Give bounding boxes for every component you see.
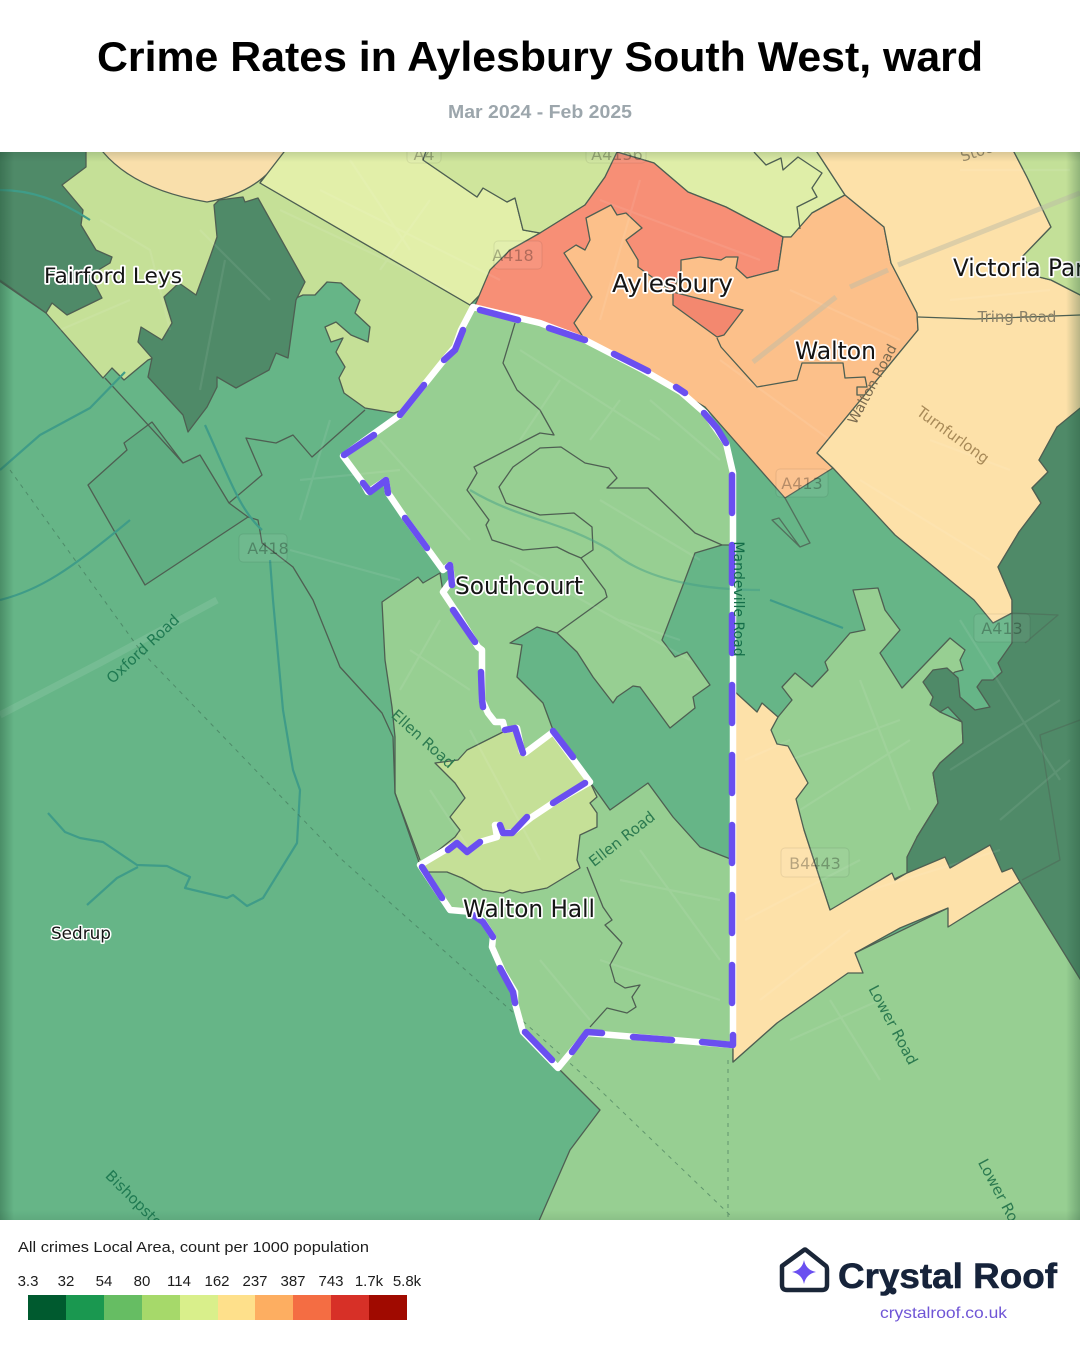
road labels: Oxford Road xyxy=(103,611,183,687)
ward internal boundary lines xyxy=(0,152,1080,1027)
area: red island within orange xyxy=(673,292,743,337)
road shields: A413 xyxy=(781,474,823,493)
icon: house with star xyxy=(782,1250,827,1290)
rivers xyxy=(0,190,843,906)
place labels: Fairford Leys xyxy=(44,264,182,288)
area: eastern dark green xyxy=(907,400,1080,995)
legend tick labels: 387 xyxy=(280,1273,306,1290)
street network xyxy=(0,169,1070,964)
legend tick labels: 114 xyxy=(167,1273,191,1290)
logo: Crystal Roof xyxy=(782,1250,1057,1322)
place labels: Walton Hall xyxy=(463,895,595,923)
road shields: A418 xyxy=(247,539,289,558)
dashed boundary line xyxy=(10,470,730,1220)
legend tick labels: 5.8k xyxy=(393,1273,422,1290)
road labels: Lower Road xyxy=(974,1156,1031,1241)
road labels: Tring Road xyxy=(977,308,1056,326)
road labels: Ellen Road xyxy=(585,808,659,870)
area: tan circle at the top xyxy=(102,152,283,203)
area: Turnfurlong tan xyxy=(810,140,1080,623)
area: mid-green wedge inside ward xyxy=(510,545,733,860)
road labels: Walton Road xyxy=(845,342,901,427)
legend colour scale xyxy=(28,1295,407,1320)
road labels: Lower Road xyxy=(865,982,921,1068)
road shields: A418 xyxy=(492,246,534,265)
legend tick labels: 162 xyxy=(204,1273,230,1290)
area: Aylesbury red-orange xyxy=(474,152,784,335)
area: Fairford Leys dark green centre xyxy=(138,197,305,432)
legend tick labels xyxy=(18,1273,422,1290)
area: western farmland block xyxy=(88,422,248,585)
road labels: Bishopstone xyxy=(102,1167,179,1244)
legend tick labels: 237 xyxy=(242,1273,268,1290)
road labels: Mandeville Road xyxy=(730,541,746,657)
legend tick labels: 32 xyxy=(58,1273,74,1290)
road shields xyxy=(239,135,1030,877)
road labels: Ellen Road xyxy=(388,706,458,772)
subtitle: date range: Mar 2024 - Feb 2025 xyxy=(448,102,632,122)
area: Victoria Park tan, south-east xyxy=(733,690,1020,1062)
place labels: Walton xyxy=(795,337,876,365)
road shields: A4156 xyxy=(591,145,643,164)
area: north central green xyxy=(422,152,616,234)
ward boundary: purple dashes xyxy=(344,310,733,1060)
legend tick labels: 1.7k xyxy=(355,1273,384,1290)
legend tick labels: 54 xyxy=(96,1273,112,1290)
legend tick labels: 3.3 xyxy=(18,1273,38,1290)
area: east light green xyxy=(771,588,965,910)
logo wordmark: Crystal Roof xyxy=(838,1257,1057,1296)
area: north pale yellow-green xyxy=(620,152,844,236)
legend tick labels: 743 xyxy=(318,1273,344,1290)
legend tick labels: 80 xyxy=(134,1273,150,1290)
area: pale green Walton Court xyxy=(420,728,597,893)
area: northern pale yellow band xyxy=(260,140,540,305)
area: large south green xyxy=(535,882,1080,1230)
logo y-tail drop xyxy=(890,1288,896,1294)
map edge vignette xyxy=(0,152,1080,1220)
place labels: Sedrup xyxy=(51,924,111,944)
ward boundary: white xyxy=(343,307,733,1068)
area: Walton orange xyxy=(564,195,918,498)
area: top-right green xyxy=(1013,152,1080,296)
road labels xyxy=(102,126,1056,1244)
legend title: All crimes Local Area, count per 1000 population xyxy=(18,1239,369,1256)
road shields: A413 xyxy=(981,619,1023,638)
area: north-west dark green xyxy=(0,140,112,315)
legend xyxy=(18,1239,422,1320)
road labels: Turnfurlong xyxy=(912,402,993,467)
place labels: Aylesbury xyxy=(612,269,733,298)
area: Fairford Leys pale green xyxy=(46,140,480,413)
road labels: Stocklake xyxy=(958,126,1033,166)
place labels xyxy=(44,254,1080,944)
title: Crime Rates in Aylesbury South West, ward xyxy=(97,33,983,80)
place labels: Southcourt xyxy=(455,572,583,600)
road shields: A4 xyxy=(413,145,435,164)
area: ward interior light green xyxy=(343,307,733,1068)
road shields: B4443 xyxy=(789,854,841,873)
railway line xyxy=(753,193,1080,362)
area: Southcourt west light green xyxy=(381,572,502,862)
website link: crystalroof.co.uk xyxy=(880,1305,1008,1322)
